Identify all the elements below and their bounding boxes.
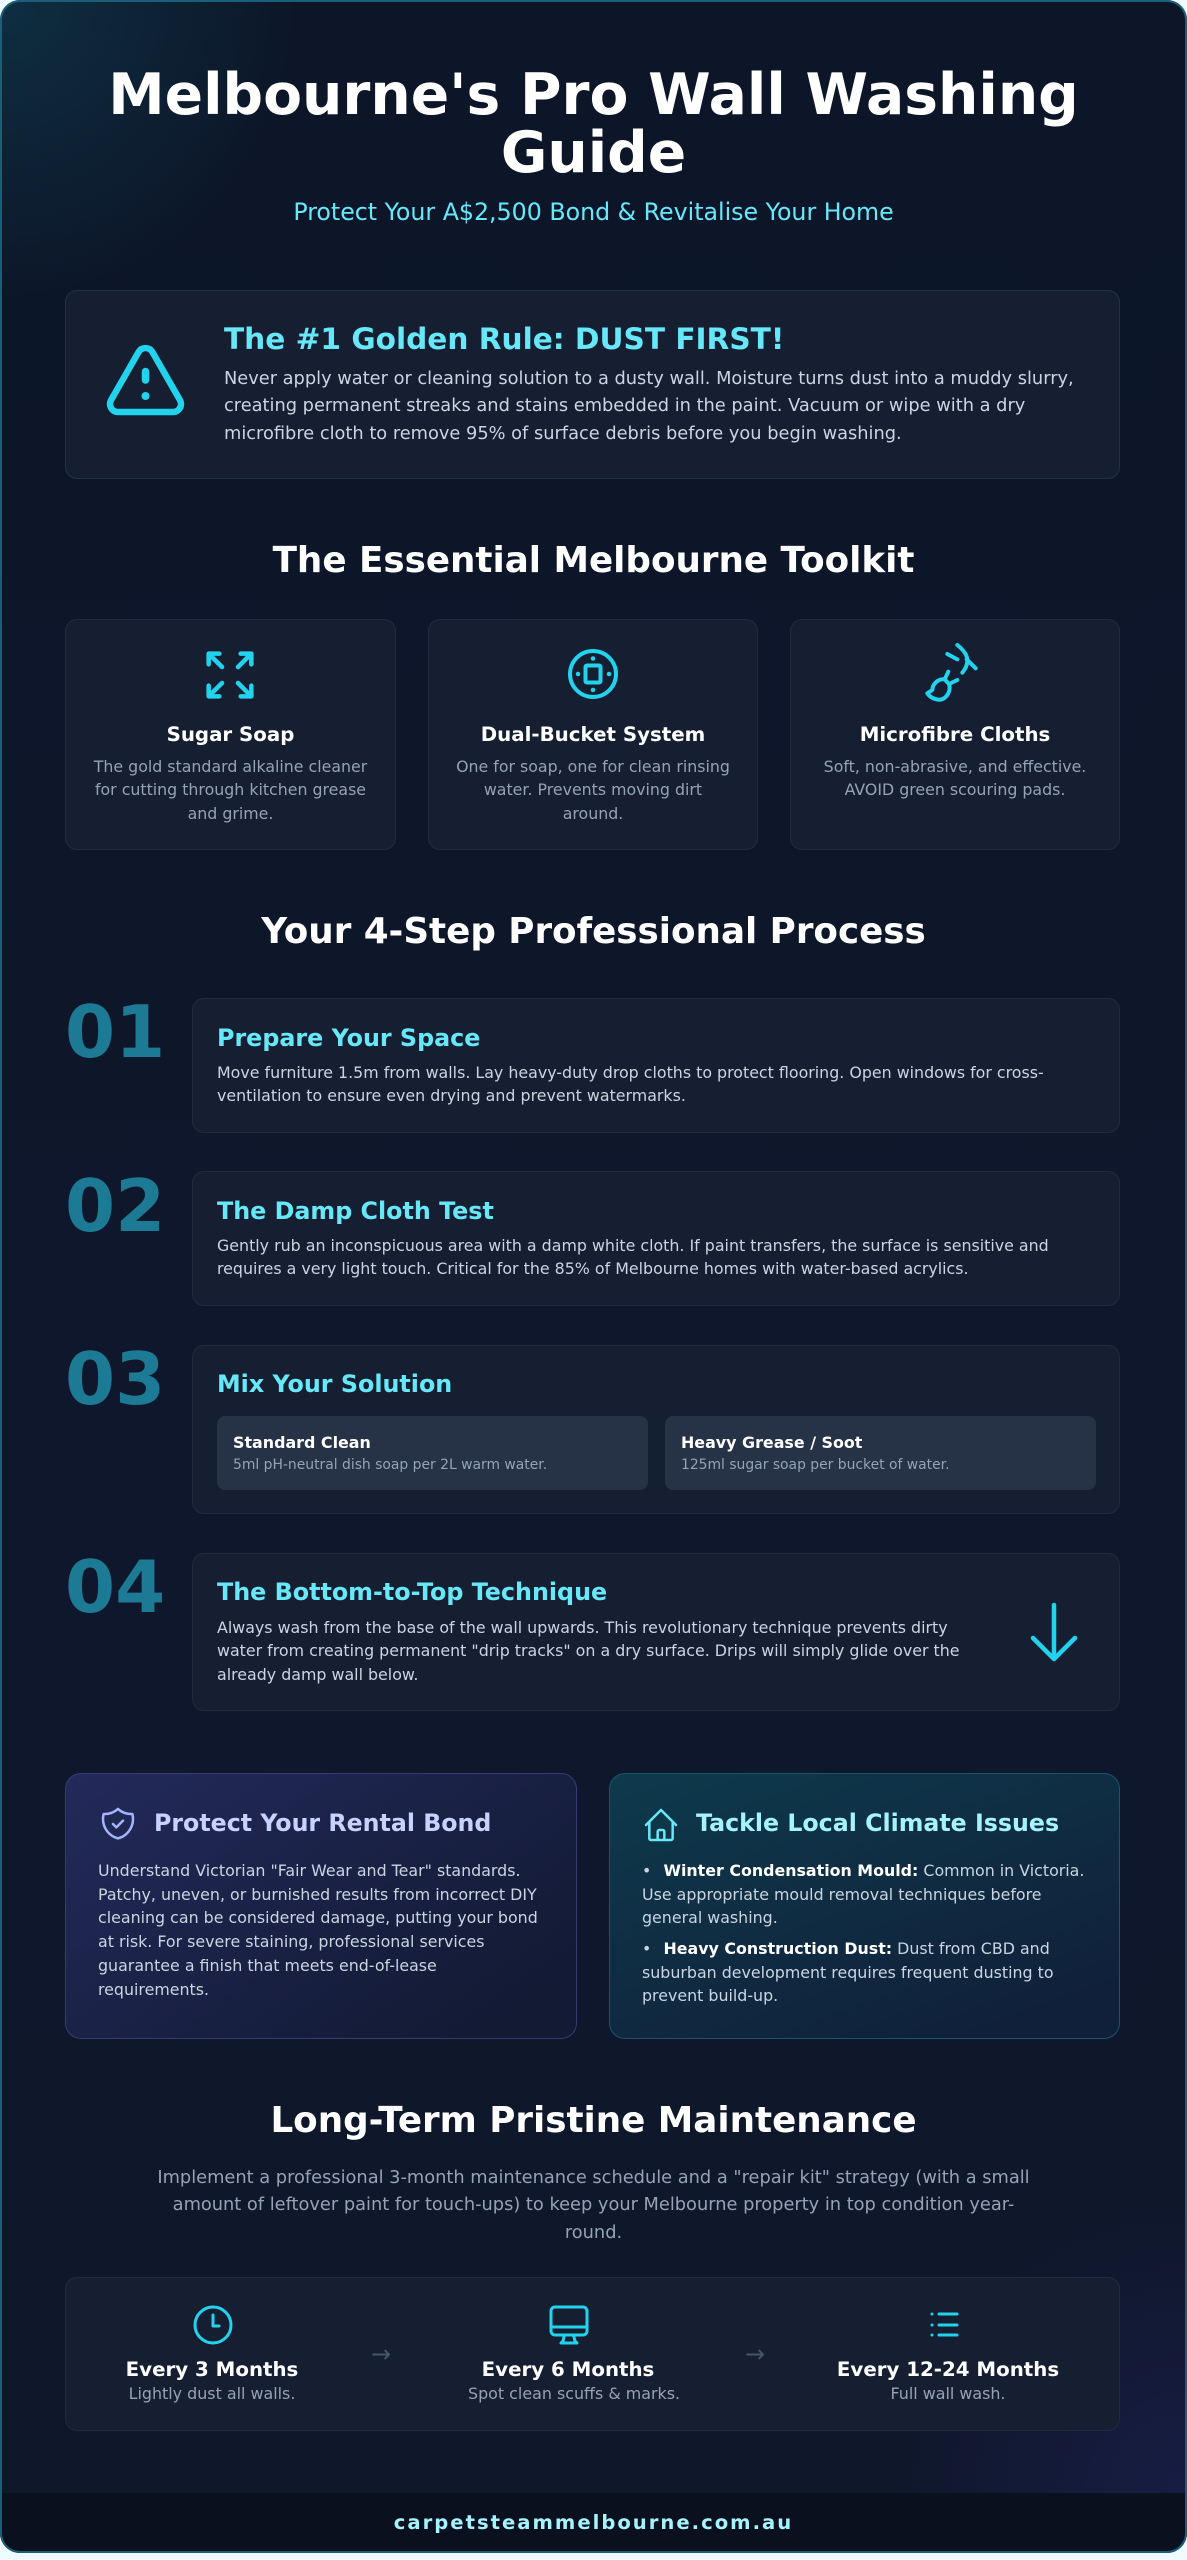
panel: tackle local climate issues <box>609 1773 1120 2039</box>
panel text: at risk. For severe staining, professional services <box>98 1932 484 1951</box>
step text: water from creating permanent "drip tracks" on a dry surface. Drips will simply glide over the <box>217 1641 960 1660</box>
card description: AVOID green scouring pads. <box>845 780 1065 799</box>
bullet: construction dust: • <box>642 1939 651 1958</box>
step title: The Bottom-to-Top Technique <box>217 1578 607 1606</box>
bullet: condensation mould: Use appropriate mould removal techniques before <box>642 1885 1042 1904</box>
icon: house <box>644 1808 678 1842</box>
subtitle: Protect Your A$2,500 Bond & Revitalise Your Home <box>293 198 894 226</box>
timeline item title: Every 12-24 Months <box>837 2358 1059 2381</box>
golden rule text: Never apply water or cleaning solution to a dusty wall. Moisture turns dust into a muddy slurry, <box>224 368 1074 389</box>
footer <box>0 2493 1187 2553</box>
bullet: construction dust <box>642 1939 1054 2005</box>
panel: step 2 <box>192 1171 1120 1306</box>
sub-card title: Heavy Grease / Soot <box>681 1433 862 1452</box>
step text: requires a very light touch. Critical for the 85% of Melbourne homes with water-based acrylics. <box>217 1259 969 1278</box>
panel heading: Protect Your Rental Bond <box>154 1809 491 1837</box>
card description <box>94 757 368 823</box>
card description: water. Prevents moving dirt <box>484 780 702 799</box>
step text: Always wash from the base of the wall upwards. This revolutionary technique prevents dirty <box>217 1618 948 1637</box>
icon: expand arrows <box>206 651 254 699</box>
bullet: construction dust: prevent build-up. <box>642 1986 778 2005</box>
step text <box>217 1236 1049 1278</box>
icon: monitor <box>550 2306 588 2344</box>
icon: brush <box>925 642 978 702</box>
timeline item text: Lightly dust all walls. <box>129 2384 295 2403</box>
step text <box>217 1618 960 1684</box>
timeline item text: Full wall wash. <box>890 2384 1005 2403</box>
bullet: condensation mould: Winter Condensation Mould: Common in Victoria. <box>664 1861 1084 1880</box>
panel: maintenance timeline <box>65 2277 1120 2431</box>
icon: shield <box>102 1808 134 1840</box>
title <box>108 62 1079 186</box>
step number 04: 04 <box>65 1545 165 1629</box>
card description <box>824 757 1086 799</box>
icon: down arrow <box>1030 1602 1078 1662</box>
panel heading: Tackle Local Climate Issues <box>696 1809 1059 1837</box>
panel text <box>98 1861 538 1999</box>
sub-card text: 125ml sugar soap per bucket of water. <box>681 1457 950 1473</box>
card description: around. <box>563 804 623 823</box>
step text: ventilation to ensure even drying and prevent watermarks. <box>217 1086 686 1105</box>
maintenance intro text: round. <box>565 2222 622 2243</box>
step title: Prepare Your Space <box>217 1024 480 1052</box>
step number 03: 03 <box>65 1337 165 1421</box>
heading: maintenance: Long-Term Pristine Maintenance <box>270 2100 917 2141</box>
icon: clock <box>194 2306 232 2344</box>
heading: toolkit: The Essential Melbourne Toolkit <box>273 540 914 581</box>
arrow: → <box>371 2340 391 2368</box>
timeline item text: Spot clean scuffs & marks. <box>468 2384 680 2403</box>
maintenance intro text: amount of leftover paint for touch-ups) to keep your Melbourne property in top condition year- <box>173 2194 1014 2215</box>
bullet: condensation mould <box>642 1861 1084 1927</box>
panel text: Understand Victorian "Fair Wear and Tear" standards. <box>98 1861 521 1880</box>
sub-card text: 5ml pH-neutral dish soap per 2L warm water. <box>233 1457 547 1473</box>
sub-card: heavy grease <box>665 1416 1096 1490</box>
title: Guide <box>501 120 686 186</box>
panel text: guarantee a finish that meets end-of-lease <box>98 1956 437 1975</box>
heading: process: Your 4-Step Professional Process <box>261 911 926 952</box>
golden rule heading: The #1 Golden Rule: DUST FIRST! <box>224 322 784 356</box>
step number 01: 01 <box>65 990 165 1074</box>
bullet: condensation mould: general washing. <box>642 1908 778 1927</box>
bullet: construction dust: suburban development requires frequent dusting to <box>642 1963 1054 1982</box>
step text: already damp wall below. <box>217 1665 418 1684</box>
card title: Dual-Bucket System <box>481 723 705 746</box>
bullet: construction dust: Heavy Construction Dust: Dust from CBD and <box>664 1939 1050 1958</box>
timeline item title: Every 6 Months <box>482 2358 654 2381</box>
icon: warning triangle <box>106 344 184 416</box>
card description: One for soap, one for clean rinsing <box>456 757 730 776</box>
step text: Move furniture 1.5m from walls. Lay heavy-duty drop cloths to protect flooring. Open windows for cross- <box>217 1063 1044 1082</box>
bullet: condensation mould: • <box>642 1861 651 1880</box>
panel: step 3 <box>192 1345 1120 1514</box>
step title: Mix Your Solution <box>217 1370 452 1398</box>
panel text: cleaning can be considered damage, putting your bond <box>98 1908 538 1927</box>
panel text: Patchy, uneven, or burnished results from incorrect DIY <box>98 1885 537 1904</box>
icon: list <box>930 2312 958 2336</box>
step title: The Damp Cloth Test <box>217 1197 494 1225</box>
panel: protect your rental bond <box>65 1773 577 2039</box>
step number 02: 02 <box>65 1164 165 1248</box>
card title: Sugar Soap <box>167 723 294 746</box>
panel: sugar soap <box>65 619 396 850</box>
maintenance intro text: Implement a professional 3-month maintenance schedule and a "repair kit" strategy (with a small <box>157 2167 1030 2188</box>
sub-card title: Standard Clean <box>233 1433 371 1452</box>
website address: carpetsteammelbourne.com.au <box>394 2511 793 2534</box>
golden rule text: microfibre cloth to remove 95% of surface debris before you begin washing. <box>224 423 902 444</box>
card description: Soft, non-abrasive, and effective. <box>824 757 1086 776</box>
arrow: → <box>745 2340 765 2368</box>
panel: microfibre cloths <box>790 619 1120 850</box>
card description <box>456 757 730 823</box>
sub-card: standard clean <box>217 1416 648 1490</box>
step text: Gently rub an inconspicuous area with a damp white cloth. If paint transfers, the surface is sensitive and <box>217 1236 1049 1255</box>
panel: step 4 <box>192 1553 1120 1711</box>
card description: for cutting through kitchen grease <box>95 780 366 799</box>
icon: bucket target <box>568 649 618 699</box>
panel: golden rule <box>65 290 1120 479</box>
title: Melbourne's Pro Wall Washing <box>108 62 1079 128</box>
golden rule text: creating permanent streaks and stains embedded in the paint. Vacuum or wipe with a dry <box>224 395 1025 416</box>
card description: The gold standard alkaline cleaner <box>94 757 367 776</box>
panel: step 1 <box>192 998 1120 1133</box>
golden rule text <box>224 368 1074 444</box>
panel text: requirements. <box>98 1980 209 1999</box>
timeline item title: Every 3 Months <box>126 2358 298 2381</box>
step text <box>217 1063 1044 1105</box>
panel: dual-bucket system <box>428 619 758 850</box>
maintenance intro text <box>157 2167 1030 2243</box>
card description: and grime. <box>188 804 273 823</box>
card title: Microfibre Cloths <box>860 723 1050 746</box>
